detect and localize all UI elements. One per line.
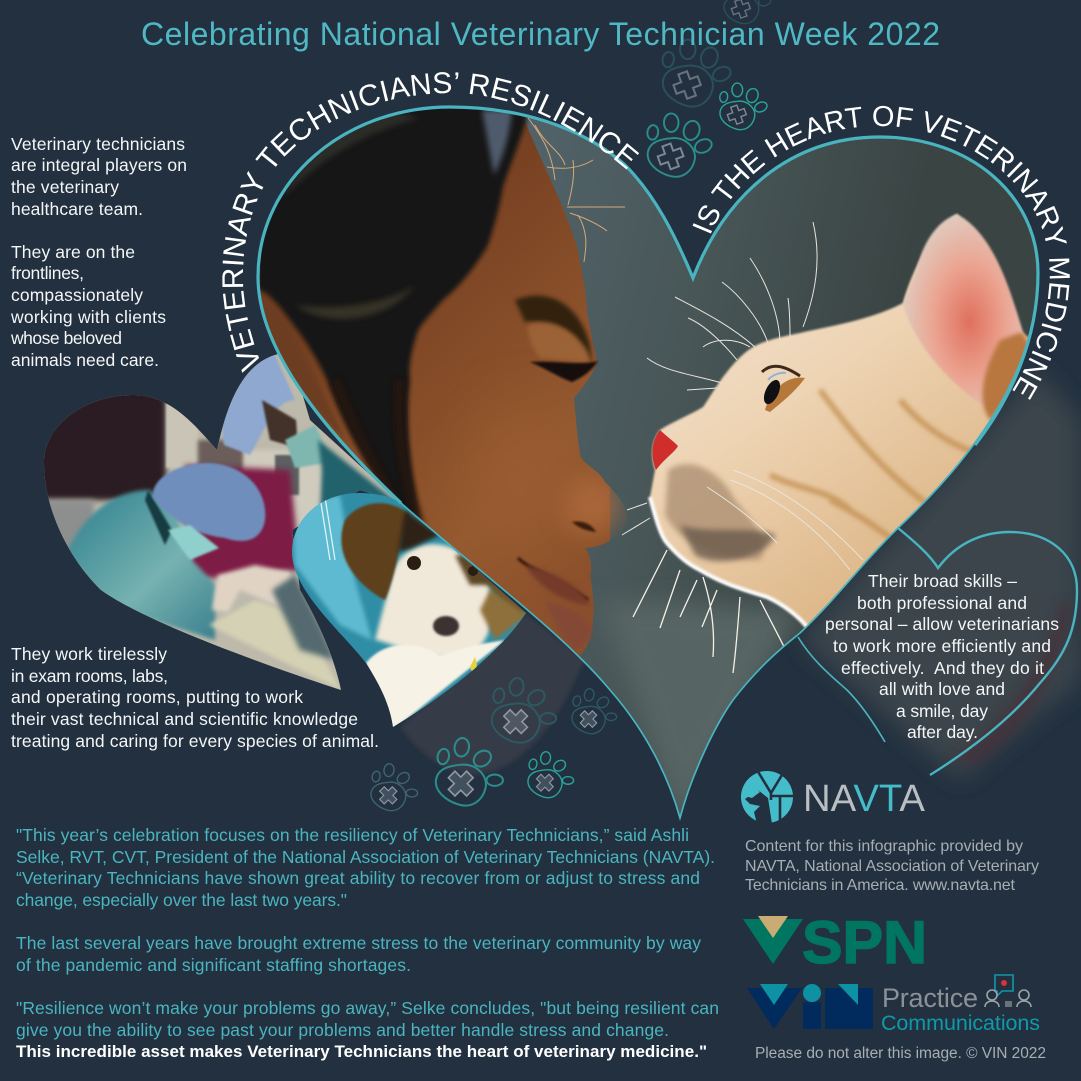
blanket xyxy=(366,640,505,730)
quote text block: "This year’s celebration focuses on the resiliency of Veterinary Technicians,” said Ashli xyxy=(16,825,689,845)
eyebrow xyxy=(515,296,592,365)
main heart outline xyxy=(258,107,1038,818)
dark hair strands on cheek xyxy=(335,380,420,525)
cat ear xyxy=(903,214,1024,410)
intro text block: are integral players on xyxy=(11,155,187,175)
cat chin rim light xyxy=(650,497,807,627)
quote text block: of the pandemic and significant staffing shortages. xyxy=(16,955,411,975)
back surgeon scrubs xyxy=(185,465,300,580)
hair sheen xyxy=(300,288,411,320)
skills text block: both professional and xyxy=(857,593,1027,613)
quote text block: The last several years have brought extreme stress to the veterinary community by way xyxy=(16,933,701,953)
hair xyxy=(258,100,530,520)
cat muzzle shading xyxy=(665,464,764,560)
nostril xyxy=(572,521,596,532)
shaded panel behind puppy xyxy=(400,613,585,775)
bottom paw prints xyxy=(371,677,617,811)
quote text block: “Veterinary Technicians have shown great ability to recover from or adjust to stress and xyxy=(16,868,700,888)
VSPN logo xyxy=(743,909,927,976)
skills text block: after day. xyxy=(907,722,978,742)
VSPN logo: SPN xyxy=(802,909,927,976)
intro text block: compassionately xyxy=(11,285,143,305)
woman's face xyxy=(250,100,620,660)
wordmark NAVTA: NAVTA xyxy=(803,778,926,820)
Practice Communications wordmark xyxy=(881,975,1040,1035)
surgery heart photo xyxy=(44,354,396,690)
NAVTA logo xyxy=(741,770,926,825)
skills text block: effectively. And they do it xyxy=(841,658,1044,678)
eye xyxy=(530,361,598,382)
Practice Communications wordmark: Communications xyxy=(881,1011,1040,1035)
cat stripes xyxy=(770,390,985,545)
cat ear outer fold xyxy=(983,333,1030,420)
stray hairs xyxy=(528,118,625,262)
intro text block: Veterinary technicians xyxy=(11,134,185,154)
intro text block: frontlines, xyxy=(11,263,84,283)
quote text block: change, especially over the last two years." xyxy=(16,890,347,910)
intro text block: working with clients xyxy=(10,307,166,327)
front surgeon mask xyxy=(168,525,219,560)
skills text block: personal – allow veterinarians xyxy=(825,614,1059,634)
puppy heart photo xyxy=(285,490,530,730)
tireless work text block: in exam rooms, labs, xyxy=(11,666,168,686)
quote text block: Selke, RVT, CVT, President of the National Association of Veterinary Technicians (NAVTA). xyxy=(16,847,715,867)
VIN logo xyxy=(747,984,873,1029)
icon: NAVTA emblem xyxy=(741,770,795,825)
main heart photo xyxy=(250,100,1050,830)
content credit: Content for this infographic provided by xyxy=(745,838,1023,855)
front surgeon cap xyxy=(153,463,265,541)
smile line and lips xyxy=(518,558,588,600)
puppy eye patch xyxy=(455,555,495,585)
eyelid highlight xyxy=(528,323,590,362)
Practice Communications wordmark: Practice xyxy=(882,983,978,1013)
curved headline left: VETERINARY TECHNICIANS’ RESILIENCE xyxy=(222,72,640,373)
skills text block xyxy=(825,571,1059,742)
back surgeon cap xyxy=(222,355,295,455)
skills text block: all with love and xyxy=(879,679,1005,699)
tireless work text block: They work tirelessly xyxy=(11,644,167,664)
small heart outline for skills text xyxy=(798,528,1077,775)
intro text block: healthcare team. xyxy=(11,199,143,219)
quote text block: This incredible asset makes Veterinary Technicians the heart of veterinary medicine." xyxy=(16,1042,707,1061)
cat jaw shadow xyxy=(680,525,775,561)
content credit xyxy=(745,838,1039,894)
curved headline right: IS THE HEART OF VETERINARY MEDICINE xyxy=(692,106,1070,400)
cat nose xyxy=(653,430,678,470)
puppy head xyxy=(375,544,492,657)
intro text block: whose beloved xyxy=(10,328,122,348)
tireless work text block: their vast technical and scientific knowledge xyxy=(11,709,358,729)
intro text block: They are on the xyxy=(11,242,135,262)
front surgeon neck xyxy=(145,490,172,545)
blurred cat body behind heart xyxy=(800,370,1081,780)
ear strip xyxy=(284,344,342,435)
tireless work text block: and operating rooms, putting to work xyxy=(11,687,303,707)
patient drape xyxy=(209,600,341,690)
cat whiskers xyxy=(622,222,863,570)
title: Celebrating National Veterinary Technician Week 2022 xyxy=(141,16,940,52)
quote text block xyxy=(16,825,719,1061)
front surgeon gown xyxy=(58,490,216,640)
tireless work text block xyxy=(11,644,379,751)
content credit: Technicians in America. www.navta.net xyxy=(745,877,1016,894)
puppy ear xyxy=(341,503,410,600)
lower grey fade xyxy=(610,601,798,814)
quote text block: give you the ability to see past your problems and better handle stress and change. xyxy=(16,1020,669,1040)
top paw prints xyxy=(646,0,773,177)
skills text block: a smile, day xyxy=(896,701,988,721)
intro text block: the veterinary xyxy=(11,177,119,197)
intro text block: animals need care. xyxy=(11,350,159,370)
cat eye xyxy=(761,366,805,412)
skills text block: to work more efficiently and xyxy=(833,636,1051,656)
nose and cheek highlights xyxy=(560,475,620,535)
copyright note: Please do not alter this image. © VIN 2022 xyxy=(755,1045,1046,1062)
icon: people and speech bubble xyxy=(985,975,1031,1007)
cat head xyxy=(650,214,1032,627)
skills text block: Their broad skills – xyxy=(868,571,1017,591)
intro text block xyxy=(10,134,187,370)
tireless work text block: treating and caring for every species of animal. xyxy=(11,731,379,751)
quote text block: "Resilience won’t make your problems go away,” Selke concludes, "but being resilient can xyxy=(16,998,719,1018)
content credit: NAVTA, National Association of Veterinary xyxy=(745,858,1039,875)
